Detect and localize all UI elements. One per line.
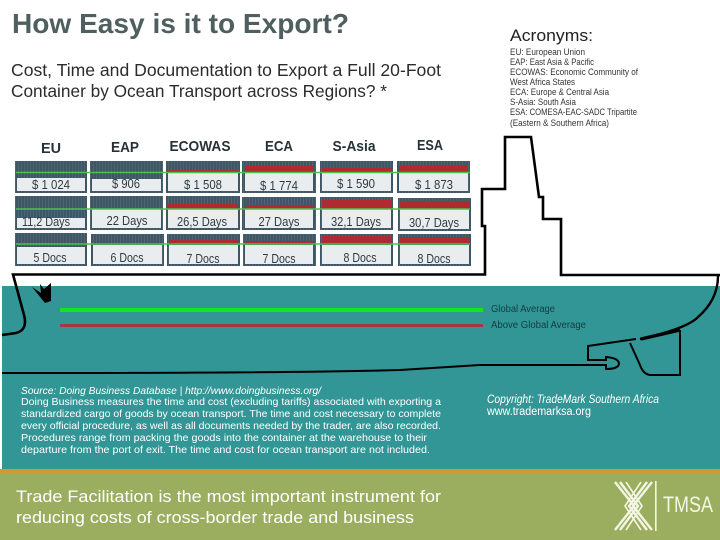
- subtitle: Container by Ocean Transport across Regions? *: [11, 81, 387, 101]
- row: document containers: 8 Docs: [418, 252, 450, 266]
- region headings: ECA: [265, 138, 293, 155]
- panel: acronyms: EU: European Union: [510, 47, 585, 57]
- legend labels: Above Global Average: [491, 320, 586, 331]
- icon: anchor: [32, 283, 51, 303]
- row: time containers: 26,5 Days: [177, 215, 227, 229]
- region headings: ECOWAS: [170, 138, 230, 155]
- copyright: [486, 394, 659, 418]
- row: time containers: 27 Days: [258, 215, 300, 229]
- source text: standardized cargo of goods by ocean transport. The time and cost necessary to complete: [21, 408, 441, 420]
- source text: [21, 385, 441, 456]
- row: time containers: 11,2 Days: [22, 215, 70, 229]
- panel: acronyms: ECA: Europe & Central Asia: [510, 87, 609, 97]
- row: document containers: 7 Docs: [186, 252, 220, 266]
- source text: Procedures range from packing the goods into the container at the warehouse to their: [21, 432, 428, 444]
- panel: acronyms: [510, 26, 638, 128]
- panel: acronyms: (Eastern & Southern Africa): [510, 118, 609, 128]
- row: document containers: 5 Docs: [34, 251, 66, 265]
- row: document containers: [15, 233, 471, 266]
- title: How Easy is it to Export?: [12, 8, 349, 39]
- region headings: ESA: [417, 137, 443, 154]
- region headings: EAP: [111, 139, 139, 156]
- panel: acronyms: EAP: East Asia & Pacific: [510, 57, 594, 67]
- legend labels: Global Average: [491, 304, 555, 315]
- panel: acronyms: ECOWAS: Economic Community of: [510, 67, 638, 77]
- region headings: EU: [41, 140, 61, 157]
- subtitle: [11, 60, 441, 101]
- footer band: [0, 469, 720, 540]
- legend bars: [60, 308, 483, 327]
- row: cost containers: $ 1 024: [32, 178, 70, 192]
- footer message: reducing costs of cross-border trade and business: [16, 508, 414, 527]
- ship hull outline: [2, 137, 720, 375]
- container grid: [15, 161, 471, 266]
- row: cost containers: $ 1 873: [415, 178, 453, 192]
- source text: every official procedure, as well as all documents needed by the trader, are also recorded.: [21, 420, 441, 432]
- row: document containers: 6 Docs: [110, 251, 144, 265]
- row: document containers: 7 Docs: [262, 252, 296, 266]
- source text: departure from the port of exit. The time and cost for ocean transport are not included.: [21, 444, 430, 456]
- logo: TMSA: [615, 481, 713, 531]
- panel: acronyms: Acronyms:: [510, 26, 593, 45]
- row: time containers: 22 Days: [106, 214, 148, 228]
- copyright: Copyright: TradeMark Southern Africa: [487, 394, 659, 406]
- row: cost containers: $ 1 590: [337, 177, 375, 191]
- legend labels: [491, 304, 586, 331]
- footer message: Trade Facilitation is the most important instrument for: [16, 487, 441, 506]
- region headings: S-Asia: [332, 138, 376, 155]
- row: cost containers: $ 906: [112, 177, 140, 191]
- sea background: [2, 286, 720, 470]
- panel: acronyms: ESA: COMESA-EAC-SADC Tripartite: [510, 107, 637, 117]
- row: time containers: [15, 196, 471, 231]
- source text: Doing Business measures the time and cost (excluding tariffs) associated with exporting a: [21, 396, 441, 408]
- footer message: [16, 487, 441, 527]
- row: time containers: 30,7 Days: [409, 216, 459, 230]
- region headings: [41, 137, 443, 157]
- row: cost containers: [15, 161, 470, 193]
- row: document containers: 8 Docs: [344, 251, 376, 265]
- global average lines: [16, 172, 470, 244]
- panel: acronyms: West Africa States: [510, 77, 575, 87]
- subtitle: Cost, Time and Documentation to Export a Full 20-Foot: [11, 60, 441, 80]
- row: cost containers: $ 1 508: [184, 178, 222, 192]
- source text: Source: Doing Business Database | http://www.doingbusiness.org/: [21, 385, 322, 397]
- panel: acronyms: S-Asia: South Asia: [510, 97, 576, 107]
- row: time containers: 32,1 Days: [331, 215, 381, 229]
- row: cost containers: $ 1 774: [260, 179, 298, 193]
- copyright: www.trademarksa.org: [486, 406, 591, 418]
